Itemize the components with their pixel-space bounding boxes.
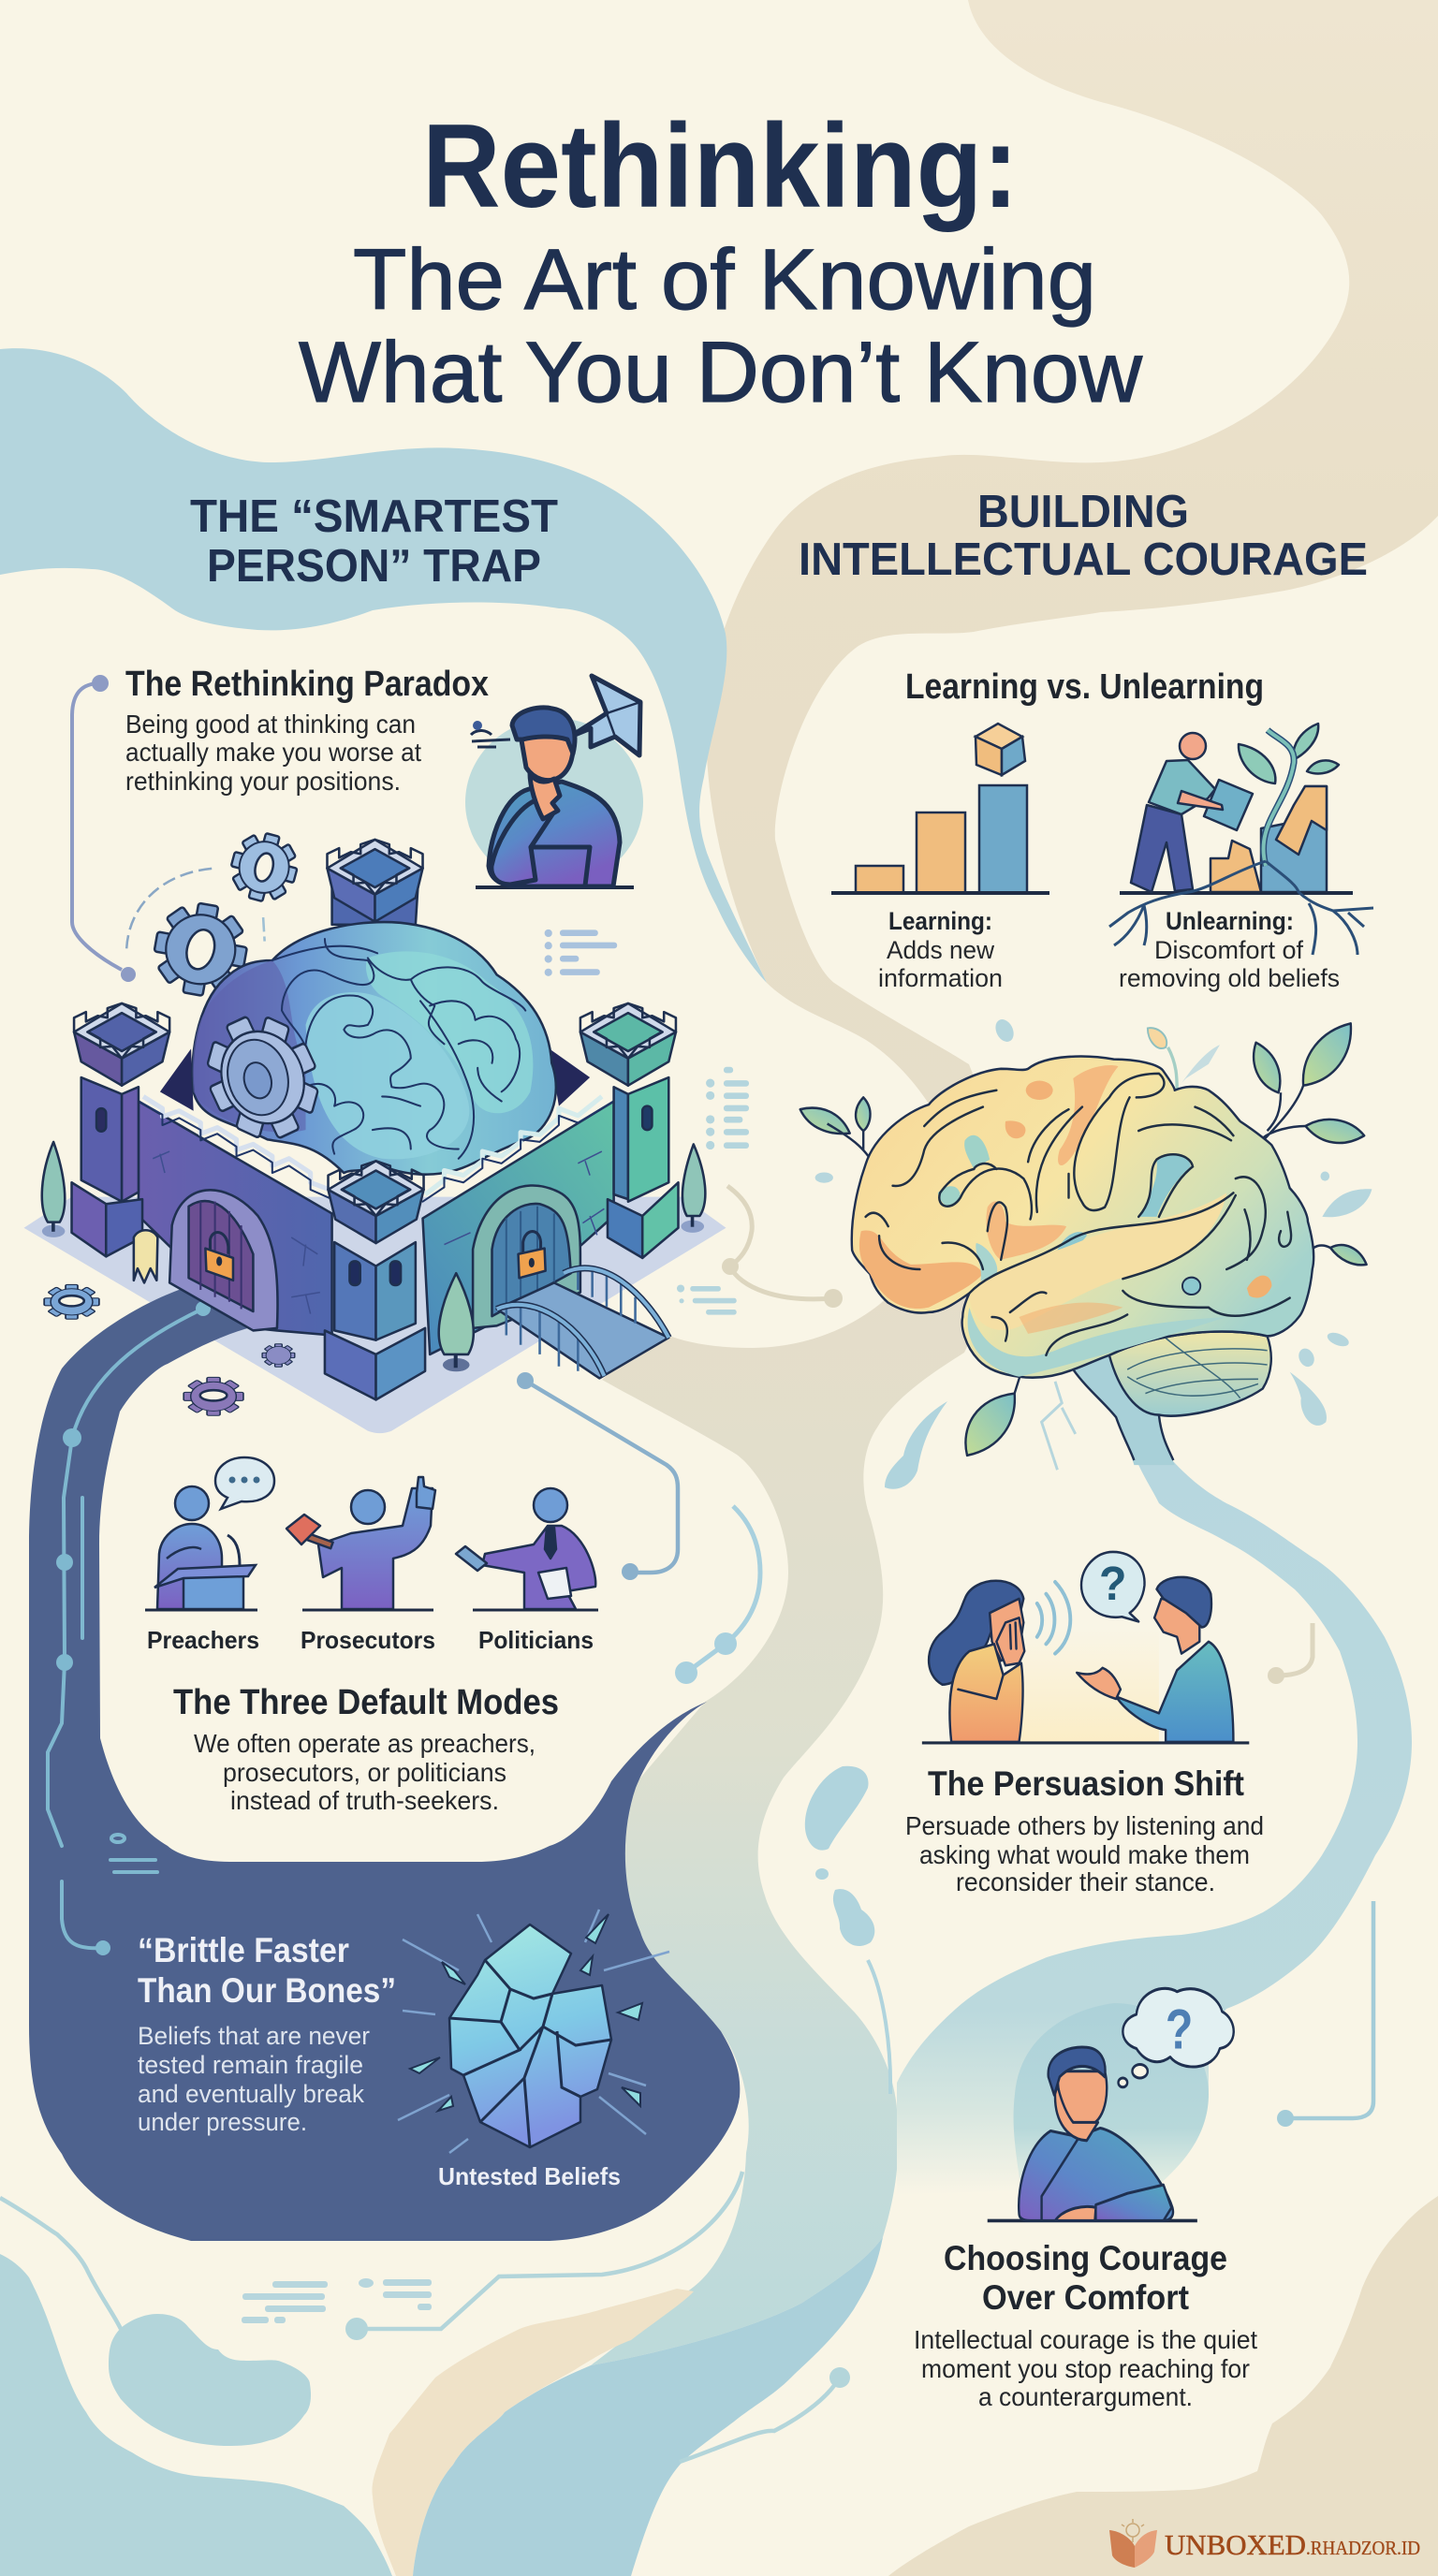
icon: thinker with cloud <box>988 1988 1234 2220</box>
connector: paradox to castle <box>72 675 136 982</box>
background: beige flowing band <box>591 0 1438 2365</box>
woman <box>929 1581 1024 1742</box>
text block: the rethinking paradox: Being good at thinking can <box>125 710 416 739</box>
text block: the persuasion shift <box>905 1764 1264 1896</box>
text block: the persuasion shift: Persuade others by listening and <box>905 1811 1264 1840</box>
text block: the three default modes: instead of truth-seekers. <box>230 1786 499 1815</box>
title line: What You Don't Know: What You Don’t Know <box>299 325 1143 420</box>
icon: learning bar chart <box>831 724 1049 893</box>
title <box>299 99 1143 420</box>
text block: choosing courage over comfort: Intellectual courage is the quiet <box>914 2325 1257 2354</box>
logo: unboxed book and wordmark: UNBOXED <box>1165 2528 1306 2561</box>
text: learning: Learning: <box>888 907 992 935</box>
person: prosecutor <box>286 1477 435 1610</box>
background: bottom-right beige corner <box>888 2196 1438 2576</box>
background: bottom beige swoosh <box>372 2289 694 2576</box>
gear on brain <box>189 999 337 1156</box>
text: learning: information <box>878 964 1003 992</box>
cerebellum <box>1109 1331 1271 1416</box>
warm and teal patches <box>859 1065 1271 1377</box>
text block: the rethinking paradox <box>125 665 489 796</box>
text block: the three default modes: We often operate as preachers, <box>194 1729 536 1758</box>
speech bubble with question <box>1081 1552 1145 1621</box>
centre tower <box>325 1161 425 1399</box>
text block: brittle faster than our bones: Beliefs that are never <box>138 2022 370 2050</box>
right gate with lock <box>473 1185 580 1328</box>
heading: smartest person trap: THE “SMARTEST <box>190 491 558 542</box>
person: politician <box>456 1488 598 1610</box>
connector: stripe to courage <box>1277 1901 1373 2127</box>
icon: thinker with cloud: ? <box>1166 1997 1193 2061</box>
text block: choosing courage over comfort: a counterargument. <box>978 2382 1193 2411</box>
right tower <box>580 1003 678 1258</box>
title line: The Art of Knowing: The Art of Knowing <box>353 232 1096 328</box>
illustration: brain fortress <box>42 827 749 1415</box>
text: unlearning: Unlearning: <box>1166 907 1294 935</box>
left tower <box>72 1003 169 1256</box>
decorative data bars: bottom <box>242 2278 432 2323</box>
labels: three modes: Preachers <box>147 1626 259 1654</box>
person: preacher <box>145 1457 274 1610</box>
thought cloud <box>1119 1988 1234 2087</box>
text block: brittle faster than our bones: tested remain fragile <box>138 2051 363 2079</box>
trees and banner <box>42 1142 705 1371</box>
left gate with lock <box>169 1190 278 1330</box>
icon: speaker modes <box>145 1457 598 1610</box>
background: bottom blue band <box>413 2237 883 2576</box>
leaves around brain <box>800 1023 1367 1456</box>
background: bottom-left blue blob <box>109 2314 311 2446</box>
text block: the persuasion shift: The Persuasion Shift <box>928 1764 1244 1803</box>
logo: unboxed book and wordmark <box>1109 2519 1420 2568</box>
text block: choosing courage over comfort: Over Comfort <box>982 2278 1189 2317</box>
icon: unlearning figure and roots <box>1109 724 1373 955</box>
background: bottom-left blue mass <box>0 2254 392 2576</box>
text block: brittle faster than our bones: “Brittle Faster <box>138 1931 349 1969</box>
cavity behind brain <box>160 1048 194 1111</box>
gears floating <box>44 827 304 1415</box>
text block: choosing courage over comfort: Choosing Courage <box>944 2239 1227 2277</box>
text block: the three default modes: The Three Default Modes <box>173 1683 559 1722</box>
text block: the rethinking paradox: rethinking your positions. <box>125 767 401 796</box>
labels: three modes <box>147 1626 594 1654</box>
brain in castle <box>189 922 556 1175</box>
logo: unboxed book and wordmark: .RHADZOR.ID <box>1306 2537 1420 2559</box>
speech bubble with question: ? <box>1099 1557 1126 1610</box>
brain hemispheres <box>852 1057 1313 1378</box>
text: unlearning: removing old beliefs <box>1119 964 1340 992</box>
brain stem <box>1073 1355 1175 1465</box>
bridge <box>497 1266 668 1378</box>
text block: the persuasion shift: asking what would make them <box>919 1840 1250 1869</box>
connector: tan arc near brain <box>722 1186 1313 1684</box>
back tower <box>327 840 423 925</box>
heading: building intellectual courage: INTELLECTUAL COURAGE <box>799 534 1368 585</box>
sound waves <box>1037 1582 1070 1654</box>
decorative data bars near castle <box>545 929 749 1315</box>
connector: pale arc with dots <box>675 1506 760 1684</box>
heading: smartest person trap <box>190 491 558 592</box>
text block: brittle faster than our bones: under pressure. <box>138 2108 307 2136</box>
decorative blue drops <box>805 1401 947 1946</box>
text block: the rethinking paradox: actually make you worse at <box>125 738 421 767</box>
heading: learning vs unlearning: Learning vs. Unlearning <box>905 667 1264 707</box>
text block: brittle faster than our bones <box>138 1931 396 2136</box>
background: blob behind courage thinker <box>1014 2003 1209 2185</box>
icon: shattered crystal <box>398 1910 669 2153</box>
text block: choosing courage over comfort: moment you stop reaching for <box>921 2354 1250 2383</box>
text: unlearning <box>1119 907 1340 992</box>
heading: smartest person trap: PERSON” TRAP <box>207 541 541 592</box>
text block: the rethinking paradox: The Rethinking Paradox <box>125 665 489 704</box>
labels: three modes: Politicians <box>478 1626 594 1654</box>
text block: brittle faster than our bones: and eventually break <box>138 2080 364 2108</box>
man <box>1077 1577 1233 1742</box>
text: unlearning: Discomfort of <box>1154 936 1303 964</box>
castle ground plate <box>24 1197 726 1433</box>
brain folds <box>866 1074 1291 1355</box>
text block: the three default modes: prosecutors, or politicians <box>223 1758 506 1787</box>
background: right blue stripe <box>897 1460 1412 2195</box>
text block: choosing courage over comfort <box>914 2239 1257 2411</box>
connector lines on the navy path <box>48 1301 211 1955</box>
text: learning <box>878 907 1003 992</box>
text: learning: Adds new <box>887 936 994 964</box>
connector: castle to three modes <box>517 1372 678 1580</box>
text block: the three default modes <box>173 1683 559 1815</box>
text block: brittle faster than our bones: Than Our Bones” <box>138 1971 396 2010</box>
castle walls <box>139 1096 614 1354</box>
text block: the persuasion shift: reconsider their stance. <box>956 1867 1215 1896</box>
connector: bottom lines <box>0 2172 850 2462</box>
background: top-left blue wave <box>0 348 767 983</box>
title line: Rethinking: Rethinking: <box>422 99 1019 232</box>
labels: three modes: Prosecutors <box>301 1626 435 1654</box>
heading: building intellectual courage <box>799 487 1368 585</box>
panel: navy path and brittle beliefs panel <box>29 1281 740 2241</box>
icon: thinker with paper arrow <box>465 676 643 887</box>
illustration: growing brain <box>800 1016 1372 1470</box>
icon: persuasion couple <box>922 1552 1249 1743</box>
caption: untested beliefs: Untested Beliefs <box>438 2162 621 2190</box>
heading: building intellectual courage: BUILDING <box>977 487 1189 537</box>
